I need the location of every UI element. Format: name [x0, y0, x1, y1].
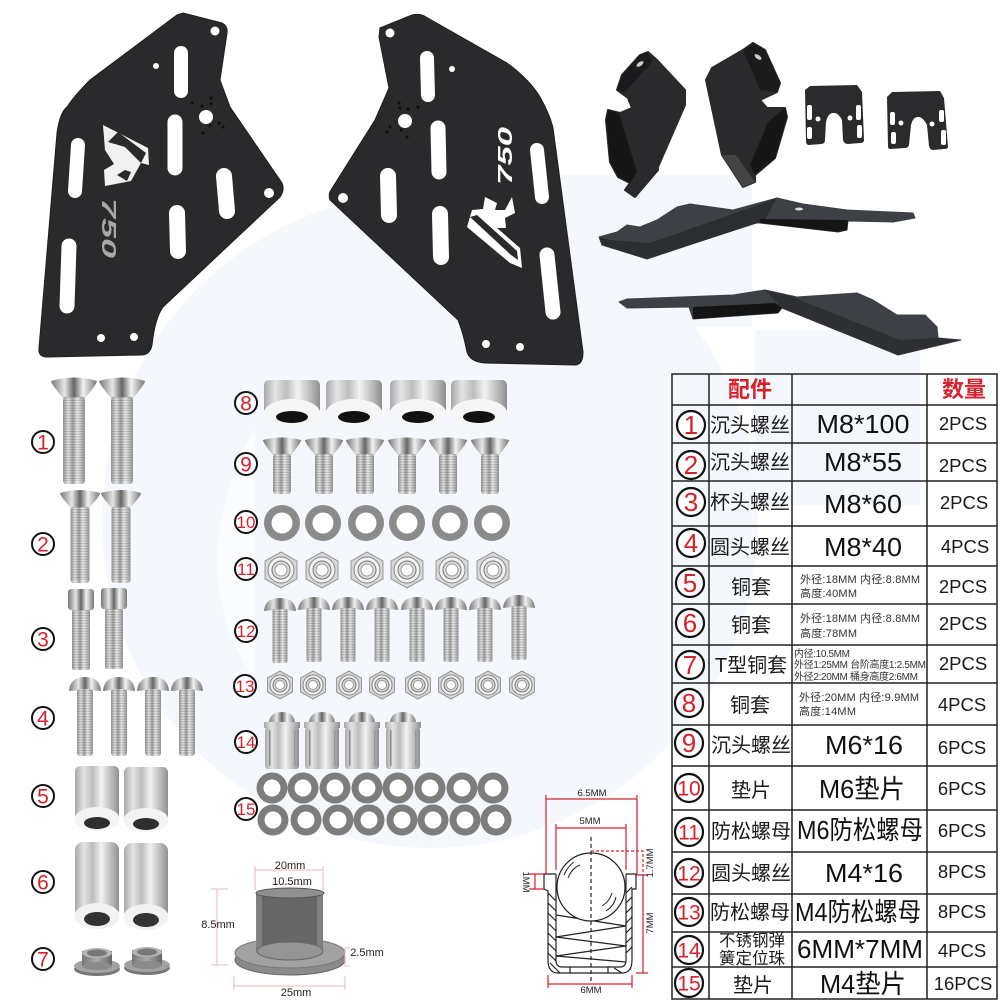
item 15 washers [256, 772, 512, 836]
row number text: 3 [684, 487, 698, 517]
bushing drawing [235, 888, 345, 975]
plate model number: 750 [97, 198, 119, 258]
dimension labels: 2.5mm [350, 947, 384, 959]
row number text: 2 [684, 450, 698, 480]
table header: 配件 [728, 377, 772, 402]
number label text: 15 [237, 800, 255, 819]
bracket: left [606, 52, 685, 197]
quantity column: 16PCS [934, 973, 992, 994]
quantity column: 4PCS [938, 694, 986, 715]
specification column: 高度:14MM [799, 704, 856, 718]
specification column: M8*55 [824, 447, 902, 477]
red dimension lines [529, 795, 648, 988]
quantity column: 2PCS [939, 653, 987, 674]
plate holes [97, 26, 274, 342]
quantity column [934, 413, 992, 994]
row number text: 5 [683, 568, 697, 598]
row number text: 6 [683, 608, 697, 638]
row number text: 4 [684, 528, 698, 558]
specification column: 内径:10.5MM [794, 647, 850, 660]
dimension labels: 8.5mm [201, 919, 235, 931]
long rail: lower [619, 290, 961, 355]
spring [556, 915, 626, 962]
specification column: M4垫片 [820, 969, 906, 999]
part name column: T型铜套 [715, 654, 787, 677]
dimension labels: 1.7MM [645, 848, 656, 878]
part name column: 圆头螺丝 [710, 536, 790, 559]
dimension labels: 10.5mm [272, 876, 312, 888]
quantity column: 6PCS [938, 820, 986, 841]
part name column: 簧定位珠 [719, 949, 786, 968]
row number text: 11 [678, 822, 700, 844]
part name column: 防松螺母 [711, 820, 791, 843]
row number circles [675, 411, 705, 997]
plate logo cutout [103, 125, 149, 186]
hardware group: right column [256, 380, 535, 836]
item 10 washers [264, 505, 510, 541]
number label text: 10 [237, 513, 255, 532]
quantity column: 2PCS [939, 413, 987, 434]
ball [557, 853, 625, 921]
number label text: 14 [237, 733, 255, 752]
quantity column: 6PCS [938, 778, 986, 799]
row number text: 14 [677, 940, 701, 962]
row number text: 13 [677, 902, 701, 924]
specification column: 外径2:20MM 桶身高度2:6MM [794, 670, 918, 683]
specification column: 外径:18MM 内径:8.8MM [800, 611, 920, 625]
number label text: 9 [240, 454, 252, 476]
specification column: 高度:40MM [800, 586, 857, 600]
item 11 lock nuts [265, 552, 509, 588]
row number text [677, 410, 701, 996]
item 7 T bushings [74, 947, 170, 976]
quantity column: 4PCS [941, 536, 989, 557]
plate slots [388, 58, 553, 312]
long rail: upper [599, 198, 915, 259]
plate small dots [386, 102, 420, 138]
quantity column: 2PCS [939, 576, 987, 597]
dimension labels [201, 860, 384, 999]
row number text: 1 [684, 410, 698, 440]
number label text: 6 [37, 872, 49, 894]
part name column: 沉头螺丝 [711, 734, 791, 757]
specification column: M4防松螺母 [795, 897, 921, 927]
quantity column: 2PCS [939, 613, 987, 634]
number label text: 8 [240, 392, 252, 416]
specification column: M6*16 [825, 730, 903, 760]
number label text: 7 [37, 948, 49, 972]
part name column: 垫片 [731, 779, 771, 802]
row number text: 10 [677, 778, 701, 800]
number label text: 11 [237, 560, 255, 579]
item 6 bushings [74, 842, 168, 930]
number label text: 4 [37, 708, 49, 730]
number label text [37, 392, 255, 972]
left mounting plate [39, 13, 283, 357]
item 1 countersunk screws [51, 378, 145, 484]
specification column [794, 409, 926, 999]
part name column: 沉头螺丝 [710, 414, 790, 437]
hardware group: bolts and bushings, left column [51, 378, 203, 976]
dimension labels: 7MM [645, 912, 656, 934]
item 5 bushings [74, 766, 168, 832]
plate model number: 750 [495, 127, 517, 185]
plate small dots [190, 96, 224, 134]
quantity column: 8PCS [938, 901, 986, 922]
number label text: 12 [237, 622, 255, 641]
number label text: 3 [37, 628, 49, 652]
table header: 数量 [942, 377, 986, 402]
plate holes [338, 28, 524, 351]
dimension labels: 1MM [520, 871, 531, 893]
ball plunger section diagram [520, 788, 656, 996]
quantity column: 2PCS [940, 492, 988, 513]
specification column: 6MM*7MM [797, 934, 923, 964]
dimension labels: 6.5MM [577, 788, 607, 799]
background watermark [102, 175, 920, 848]
dimension labels: 20mm [275, 860, 305, 872]
item 8 spacers [264, 380, 507, 427]
plate logo cutout [467, 197, 522, 268]
part name column: 铜套 [731, 576, 771, 599]
dimension labels [520, 788, 656, 996]
specification column: 高度:78MM [800, 626, 857, 640]
item 9 countersunk screws [263, 438, 509, 494]
row number text: 8 [682, 688, 696, 718]
number label text: 1 [37, 432, 49, 454]
table grid [672, 374, 997, 999]
table header [728, 377, 986, 402]
circled number labels [32, 392, 257, 970]
slotted plate: left [805, 85, 864, 145]
specification column: 外径1:25MM 台阶高度1:2.5MM [794, 658, 926, 671]
number label text: 5 [37, 786, 49, 808]
dimension labels: 25mm [281, 987, 311, 999]
plate slots [67, 53, 227, 306]
item 12 round head screws [264, 595, 535, 663]
dimension labels: 5MM [579, 816, 601, 827]
part name column [710, 414, 791, 997]
specification column: 外径:18MM 内径:8.8MM [800, 572, 920, 586]
item 13 lock nuts [268, 671, 534, 699]
dimension labels: 6MM [580, 985, 602, 996]
item 2 countersunk screws [60, 490, 141, 583]
row number text: 15 [677, 972, 701, 996]
specification column: 外径:20MM 内径:9.9MM [799, 690, 919, 704]
bracket: right [706, 43, 787, 187]
specification column: M8*40 [824, 532, 902, 562]
number label text: 2 [37, 534, 49, 556]
number label text: 13 [236, 677, 254, 696]
specification column: M4*16 [825, 858, 903, 888]
item 14 spring ball plungers [264, 712, 421, 769]
specification column: M8*60 [824, 489, 902, 519]
part name column: 铜套 [730, 694, 770, 717]
item 3 cap head screws [68, 588, 127, 670]
quantity column: 6PCS [938, 737, 986, 758]
plunger body [544, 837, 636, 982]
part name column: 沉头螺丝 [710, 451, 790, 474]
dimension lines [211, 866, 350, 990]
quantity column: 2PCS [939, 455, 987, 476]
part name column: 垫片 [733, 974, 773, 997]
row number text: 12 [677, 862, 701, 886]
quantity column: 8PCS [938, 861, 986, 882]
part name column: 铜套 [731, 614, 771, 637]
row number text: 7 [683, 650, 697, 680]
specification column: M8*100 [816, 409, 910, 439]
item 4 round head screws [69, 677, 203, 756]
right mounting plate [329, 14, 583, 365]
part name column: 圆头螺丝 [711, 862, 791, 885]
part name column: 防松螺母 [710, 901, 790, 924]
parts table [672, 374, 997, 999]
row number text: 9 [682, 728, 696, 758]
part name column: 不锈钢弹 [719, 931, 785, 950]
slotted plate: right [887, 91, 948, 150]
quantity column: 4PCS [938, 940, 986, 961]
specification column: M6防松螺母 [797, 815, 923, 845]
specification column: M6垫片 [819, 774, 905, 804]
T bushing diagram [201, 860, 384, 999]
part name column: 杯头螺丝 [710, 491, 790, 514]
